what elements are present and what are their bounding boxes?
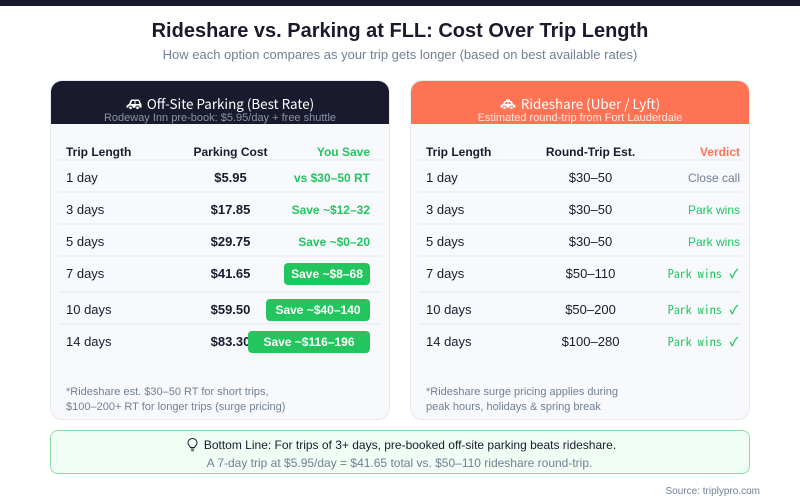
row: 1 day: 1 day bbox=[66, 170, 98, 185]
row: 1 day: $30–50 bbox=[569, 170, 612, 185]
row: 14 days: Save ~$116–196 bbox=[263, 335, 355, 349]
row: 5 days: 5 days bbox=[66, 234, 104, 249]
row: 5 days: Park wins bbox=[688, 235, 740, 249]
column headers: rideshare: Verdict bbox=[700, 145, 740, 159]
row: 1 day: Close call bbox=[688, 171, 740, 185]
row: 5 days: Save ~$0–20 bbox=[298, 235, 370, 249]
column headers: rideshare: Round-Trip Est. bbox=[546, 145, 635, 159]
panel header: parking: Rodeway Inn pre-book: $5.95/day + free shuttle bbox=[104, 112, 336, 124]
panel: off-site parking bbox=[50, 80, 390, 420]
source: Source: triplypro.com bbox=[666, 486, 760, 497]
column headers: parking: Trip Length bbox=[66, 145, 131, 159]
row: 14 days: Park wins ✓ bbox=[668, 333, 738, 350]
row: 1 day: 1 day bbox=[426, 170, 458, 185]
row: 14 days: $100–280 bbox=[562, 334, 619, 349]
column headers: parking: Parking Cost bbox=[193, 145, 268, 159]
row: 3 days: 3 days bbox=[66, 202, 104, 217]
column headers: rideshare: Trip Length bbox=[426, 145, 491, 159]
column headers: parking: You Save bbox=[317, 145, 370, 159]
footnote: rideshare: peak hours, holidays & spring break bbox=[426, 401, 601, 413]
title: Rideshare vs. Parking at FLL: Cost Over Trip Length bbox=[152, 20, 648, 42]
callout: bottom line bbox=[50, 430, 750, 474]
row: 7 days: $50–110 bbox=[566, 266, 615, 281]
row: 3 days: Park wins bbox=[688, 203, 740, 217]
footnote: rideshare: *Rideshare surge pricing applies during bbox=[426, 386, 618, 398]
row: 10 days: $50–200 bbox=[565, 302, 616, 317]
column headers: rideshare bbox=[418, 145, 742, 161]
row: 5 days: $29.75 bbox=[211, 234, 250, 249]
row: 7 days bbox=[418, 265, 742, 293]
row: 1 day: vs $30–50 RT bbox=[294, 171, 370, 185]
row: 14 days: $83.30 bbox=[211, 334, 250, 349]
panel header: parking bbox=[50, 80, 390, 124]
row: 10 days: 10 days bbox=[66, 302, 112, 317]
panel: rideshare bbox=[410, 80, 750, 420]
footnote: parking: *Rideshare est. $30–50 RT for short trips, bbox=[66, 386, 269, 398]
row: 3 days bbox=[58, 202, 382, 225]
footnote: parking bbox=[66, 386, 285, 413]
row: 10 days bbox=[58, 299, 382, 325]
footnote: rideshare bbox=[426, 386, 618, 413]
row: 7 days: $41.65 bbox=[211, 266, 250, 281]
row: 5 days bbox=[418, 234, 742, 257]
row: 3 days bbox=[418, 202, 742, 225]
row: 5 days: 5 days bbox=[426, 234, 464, 249]
row: 5 days bbox=[58, 234, 382, 257]
callout headline: Bottom Line: For trips of 3+ days, pre-booked off-site parking beats rideshare. bbox=[204, 438, 616, 452]
row: 7 days: Save ~$8–68 bbox=[291, 267, 363, 281]
callout detail: A 7-day trip at $5.95/day = $41.65 total vs. $50–110 rideshare round-trip. bbox=[207, 456, 592, 470]
row: 1 day: $5.95 bbox=[214, 170, 247, 185]
row: 14 days bbox=[66, 331, 370, 353]
footnote: parking: $100–200+ RT for longer trips (surge pricing) bbox=[66, 401, 285, 413]
row: 3 days: 3 days bbox=[426, 202, 464, 217]
panel header: rideshare: Rideshare (Uber / Lyft) bbox=[521, 93, 660, 113]
row: 3 days: $30–50 bbox=[569, 202, 612, 217]
row: 10 days: 10 days bbox=[426, 302, 472, 317]
row: 14 days: 14 days bbox=[426, 334, 472, 349]
row: 3 days: Save ~$12–32 bbox=[292, 203, 370, 217]
row: 7 days: 7 days bbox=[66, 266, 104, 281]
row: 10 days: Save ~$40–140 bbox=[275, 303, 361, 317]
row: 10 days bbox=[418, 301, 742, 325]
row: 5 days: $30–50 bbox=[569, 234, 612, 249]
row: 7 days bbox=[58, 263, 382, 293]
panel header: rideshare: Estimated round-trip from Fort Lauderdale bbox=[478, 112, 682, 124]
row: 3 days: $17.85 bbox=[211, 202, 250, 217]
row: 1 day bbox=[418, 170, 742, 193]
top bar bbox=[0, 0, 800, 6]
row: 1 day bbox=[58, 170, 382, 193]
row: 10 days: Park wins ✓ bbox=[668, 301, 738, 318]
panel header: rideshare bbox=[410, 80, 750, 124]
column headers: parking bbox=[58, 145, 382, 161]
subtitle: How each option compares as your trip gets longer (based on best available rates) bbox=[163, 47, 637, 62]
panel header: parking: Off-Site Parking (Best Rate) bbox=[147, 93, 314, 113]
row: 10 days: $59.50 bbox=[211, 302, 250, 317]
row: 7 days: 7 days bbox=[426, 266, 464, 281]
row: 14 days: 14 days bbox=[66, 334, 112, 349]
row: 14 days bbox=[426, 333, 738, 350]
row: 7 days: Park wins ✓ bbox=[668, 265, 738, 282]
